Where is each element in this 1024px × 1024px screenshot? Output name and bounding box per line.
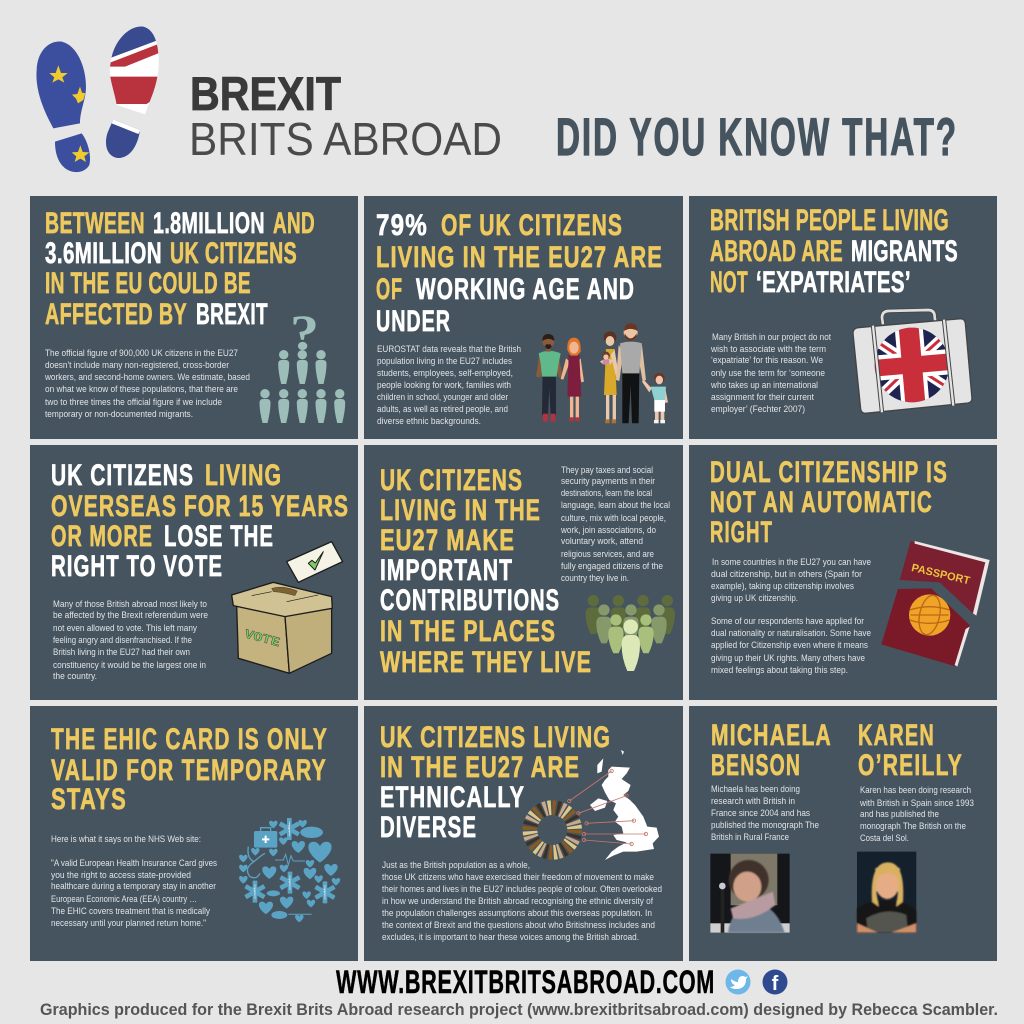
heading: ‘EXPATRIATES’ (756, 266, 911, 299)
heading: UK CITIZENS (170, 237, 297, 270)
heading: IN THE EU COULD BE (45, 267, 251, 300)
heading: UK CITIZENS (380, 464, 523, 497)
logo wordmark: BRITS ABROAD: BRITS ABROAD (189, 113, 502, 165)
body text: The EHIC covers treatment that is medically (51, 906, 210, 917)
body text: work, join associations, do (560, 525, 656, 536)
body text: destinations, learn the local (561, 488, 652, 499)
body text: The official figure of 900,000 UK citizens in the EU27 (45, 348, 238, 359)
heading: IMPORTANT (380, 554, 513, 587)
heading: LIVING IN THE EU27 ARE (376, 241, 663, 274)
icon: twitter (726, 970, 750, 994)
heading: Michaela Benson: BENSON (711, 749, 801, 782)
heading (710, 456, 948, 549)
heading: Karen O'Reilly: KAREN (858, 719, 935, 752)
bio: Michaela: research with British in (711, 796, 795, 807)
heading: Michaela Benson (711, 719, 832, 782)
panel: right to vote (30, 445, 358, 700)
heading: OF (376, 273, 403, 306)
icon: ballot box with voting slip: VOTE (243, 627, 282, 650)
body text (44, 348, 250, 420)
body text: European Economic Area (EEA) country … (51, 894, 197, 905)
heading: Karen O'Reilly: O’REILLY (858, 749, 963, 782)
panel: dual citizenship (689, 445, 997, 700)
heading: MIGRANTS (851, 235, 958, 268)
body text: fully engaged citizens of the (561, 561, 663, 572)
body text: the context of Brexit and the questions about who Britishness includes and (382, 920, 655, 931)
body text: giving up their UK rights. Many others have (711, 653, 865, 664)
heading: UNDER (376, 305, 451, 338)
body text: the population challenges assumptions about this overseas population. In (382, 908, 652, 919)
body text: assignment for their current (711, 392, 814, 403)
bio: Karen: with British in Spain since 1993 (859, 798, 974, 809)
body text: EUROSTAT data reveals that the British (377, 344, 521, 355)
heading (380, 721, 611, 844)
body text: security payments in their (561, 476, 656, 487)
body text: In some countries in the EU27 you can have (712, 557, 871, 568)
icon: question mark above people: ? (290, 304, 319, 360)
heading: OVERSEAS FOR 15 YEARS (51, 490, 349, 523)
body text: feeling angry and disenfranchised. If the (53, 635, 192, 646)
heading: RIGHT (710, 516, 773, 549)
heading (51, 459, 349, 583)
bio: Karen: Karen has been doing research (860, 785, 971, 796)
heading: VALID FOR TEMPORARY (51, 754, 327, 787)
body text: adults, as well as retired people, and (377, 404, 508, 415)
panel: important contributions (364, 445, 683, 700)
body text: "A valid European Health Insurance Card gives (51, 858, 217, 869)
heading (376, 209, 663, 338)
body text (710, 332, 831, 415)
body text: employer’ (Fechter 2007) (711, 404, 805, 415)
photo: Michaela Benson (710, 854, 790, 933)
heading: WORKING AGE AND (416, 273, 635, 306)
bio: Karen: Costa del Sol. (860, 833, 909, 844)
footer: credit line: Graphics produced for the Brexit Brits Abroad research project (www.brexitbritsabroad.com) designed by Rebecca Scambler. (40, 1001, 998, 1019)
body text: people looking for work, families with (377, 380, 511, 391)
body text: dual citizenship, but in others (Spain for (711, 569, 863, 580)
body text: voluntary work, attend (561, 536, 643, 547)
panel: EHIC card (30, 706, 358, 961)
heading: 79% (376, 209, 428, 242)
body text: dual nationality or naturalisation. Some have (711, 628, 871, 639)
photo: Karen O'Reilly (857, 852, 916, 933)
heading: LOSE THE (164, 520, 274, 553)
body text: children in school, younger and older (377, 392, 509, 403)
heading: UK CITIZENS LIVING (380, 721, 611, 754)
heading: IN THE PLACES (380, 615, 556, 648)
panel: authors (689, 706, 997, 961)
heading: CONTRIBUTIONS (380, 584, 560, 617)
bio: Karen: monograph The British on the (860, 821, 966, 832)
body text (53, 599, 208, 682)
body text: country they live in. (561, 573, 629, 584)
body text: in how we understand the British abroad recognising the ethnic diversity of (382, 896, 653, 907)
heading: THE EHIC CARD IS ONLY (51, 723, 328, 756)
logo: footprints with EU and UK flags (36, 23, 163, 172)
heading: EU27 MAKE (380, 524, 515, 557)
bio: Michaela (711, 784, 819, 843)
bio: Karen (859, 785, 974, 844)
heading: 1.8MILLION (153, 207, 265, 240)
icon: facebook (762, 970, 788, 995)
heading: AFFECTED BY (45, 298, 187, 331)
logo wordmark: BREXIT: BREXIT (190, 67, 341, 120)
heading: UK CITIZENS (51, 459, 194, 492)
body text: ‘expatriate’ for this reason. We (711, 355, 823, 366)
body text: those UK citizens who have exercised their freedom of movement to make (382, 872, 654, 883)
body text: religious services, and are (561, 549, 654, 560)
body text: healthcare during a temporary stay in another (51, 881, 217, 892)
body text: constituency it would be the largest one in (53, 660, 206, 671)
heading: ETHNICALLY (380, 781, 525, 814)
heading: Karen O'Reilly (858, 719, 963, 782)
illustration: ring of arms linked to UK map (530, 750, 659, 860)
body text: population living in the EU27 includes (377, 356, 512, 367)
body text: excludes, it is important to hear these voices among the British abroad. (382, 932, 639, 943)
body text: on what we know of these populations, that there are (45, 384, 238, 395)
icon: ballot box with voting slip (232, 542, 343, 673)
body text: diverse ethnic backgrounds. (377, 416, 481, 427)
body text: Here is what it says on the NHS Web site: (51, 834, 201, 845)
heading: STAYS (51, 783, 127, 816)
body text: the country. (53, 671, 97, 682)
heading: RIGHT TO VOTE (51, 550, 223, 583)
panel: working age (364, 196, 683, 439)
heading: 3.6MILLION (45, 237, 162, 270)
bio: Michaela: published the monograph The (711, 820, 819, 831)
body text (560, 465, 670, 584)
body text: Many of those British abroad most likely to (53, 599, 207, 610)
bio: Michaela: British in Rural France (711, 832, 789, 843)
icon: circle of medical symbols (239, 818, 340, 922)
body text: students, employees, self-employed, (377, 368, 513, 379)
heading (380, 464, 592, 679)
icon: question mark above people (260, 304, 345, 423)
heading (45, 207, 315, 331)
body text: workers, and second-home owners. We estimate, based (44, 372, 250, 383)
body text: only use the term for ‘someone (711, 368, 825, 379)
heading: BREXIT (196, 298, 268, 331)
body text: you the right to access state-provided (51, 870, 191, 881)
body text: who takes up an international (710, 380, 818, 391)
bio: Michaela: France since 2004 and has (711, 808, 810, 819)
heading: WHERE THEY LIVE (380, 646, 592, 679)
body text: wish to associate with the term (710, 344, 826, 355)
body text: They pay taxes and social (561, 465, 653, 476)
body text: necessary until your planned return home." (51, 918, 206, 929)
panel: migrants not expatriates (689, 196, 997, 439)
footer: website address: WWW.BREXITBRITSABROAD.COM (336, 964, 715, 1000)
heading: BETWEEN (45, 207, 145, 240)
body text: their homes and lives in the EU27 includes people of colour. Often overlooked (382, 884, 662, 895)
body text: language, learn about the local (561, 500, 670, 511)
heading: AND (273, 207, 315, 240)
body text: Just as the British population as a whole, (382, 860, 530, 871)
icon: facebook: f (772, 973, 779, 995)
heading: LIVING IN THE (380, 494, 541, 527)
body text: culture, mix with local people, (561, 513, 666, 524)
body text: two to three times the official figure if we include (45, 397, 222, 408)
body text: Many British in our project do not (712, 332, 831, 343)
body text (382, 860, 662, 943)
bio: Michaela: Michaela has been doing (711, 784, 800, 795)
illustration: diverse family (536, 323, 668, 423)
icon: crowd of people (586, 595, 675, 671)
heading: NOT (710, 266, 748, 299)
heading: DIVERSE (380, 811, 477, 844)
body text: doesn't include many non-registered, cross-border (45, 360, 230, 371)
heading: LIVING (205, 459, 282, 492)
panel: number of UK citizens affected (30, 196, 358, 439)
heading: ABROAD ARE (710, 235, 843, 268)
body text: mixed feelings about taking this step. (711, 665, 848, 676)
heading: Michaela Benson: MICHAELA (711, 719, 832, 752)
heading (710, 204, 958, 299)
heading: OR MORE (51, 520, 153, 553)
heading: IN THE EU27 ARE (380, 751, 580, 784)
heading: OF UK CITIZENS (441, 209, 623, 242)
body text (377, 344, 521, 427)
body text (51, 834, 217, 929)
icon: torn passport: PASSPORT (910, 562, 971, 587)
body text: be affected by the Brexit referendum were (53, 610, 208, 621)
body text: applied for Citizenship even where it means (711, 640, 868, 651)
body text: British living in the EU27 had their own (53, 647, 190, 658)
icon: torn passport (881, 541, 990, 667)
body text: giving up UK citizenship. (711, 593, 798, 604)
body text: not even allowed to vote. This left many (53, 623, 197, 634)
body text: example), taking up citizenship involves (711, 581, 854, 592)
heading (51, 723, 328, 816)
body text (711, 557, 871, 676)
icon: suitcase with union flag (853, 310, 972, 413)
bio: Karen: and has published the (860, 809, 939, 820)
body text: Some of our respondents have applied for (711, 616, 865, 627)
body text: temporary or non-documented migrants. (45, 409, 193, 420)
panel: ethnically diverse (364, 706, 683, 961)
